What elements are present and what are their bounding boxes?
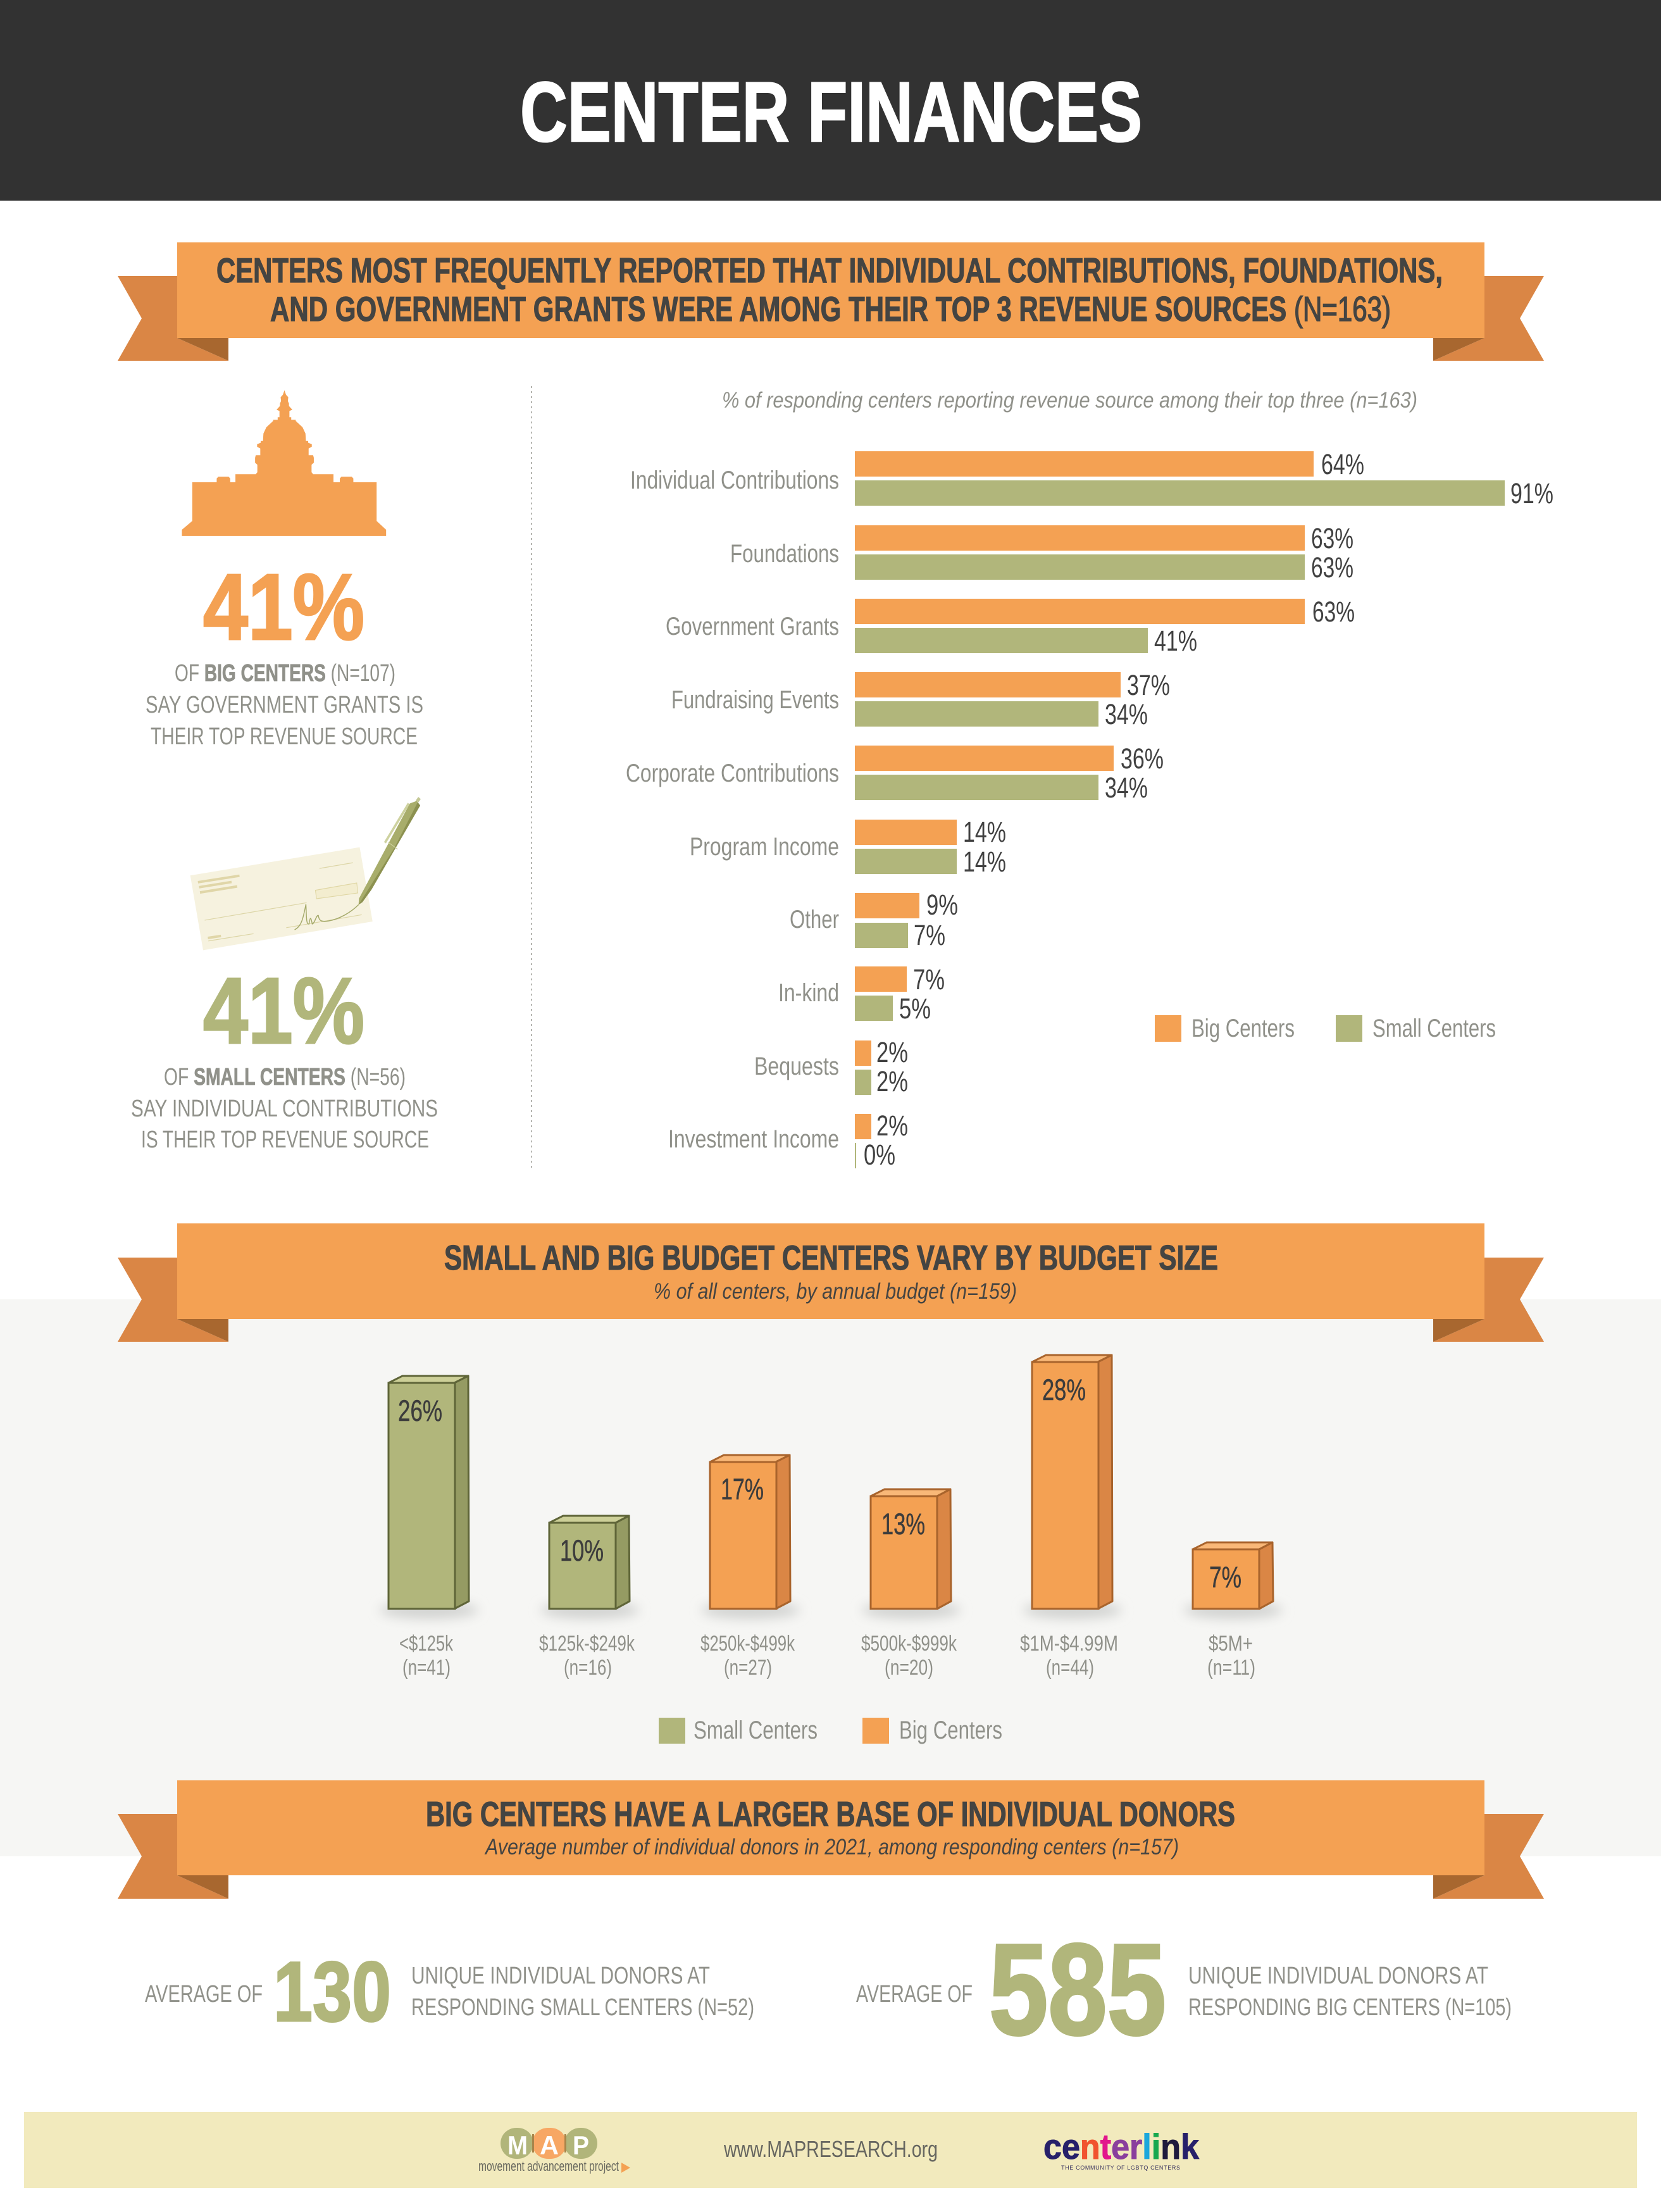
bar: under $125k: 26% xyxy=(398,1394,442,1427)
row: fundraising events xyxy=(671,669,1170,730)
stat: small centers: IS THEIR TOP REVENUE SOURCE xyxy=(141,1127,429,1153)
bar: under $125k: (n=41) xyxy=(402,1656,451,1680)
bar: $125k-$249k xyxy=(539,1516,639,1680)
ribbon heading: budget size xyxy=(118,1223,1544,1342)
logo: centerlink: THE COMMUNITY OF LGBTQ CENTERS xyxy=(1061,2165,1180,2171)
ribbon heading: individual donors xyxy=(118,1780,1544,1899)
stat: small center donors: AVERAGE OF xyxy=(145,1981,263,2008)
legend: budget chart: Big Centers xyxy=(899,1716,1002,1744)
stat: small center donors: 130 xyxy=(273,1945,391,2039)
row: program income: 14% xyxy=(963,816,1006,848)
stat: big center donors: RESPONDING BIG CENTERS (N=105) xyxy=(1188,1994,1512,2021)
row: foundations: Foundations xyxy=(730,540,839,568)
bar: $500k-$999k xyxy=(861,1489,961,1680)
stat: small center donors: RESPONDING SMALL CENTERS (N=52) xyxy=(411,1994,754,2021)
ribbon heading: revenue sources xyxy=(118,242,1544,361)
row: fundraising events: Fundraising Events xyxy=(671,686,839,714)
stat: big centers: THEIR TOP REVENUE SOURCE xyxy=(151,723,418,750)
row: investment income: Investment Income xyxy=(668,1125,839,1153)
row: individual contributions: Individual Contributions xyxy=(630,466,839,494)
legend: budget chart xyxy=(659,1716,1002,1744)
row: in-kind: In-kind xyxy=(778,979,839,1007)
bar chart: revenue sources xyxy=(626,448,1553,1171)
row: in-kind xyxy=(778,963,945,1025)
row: corporate contributions xyxy=(626,742,1164,804)
stat: small centers xyxy=(131,959,438,1153)
stat: big center donors: UNIQUE INDIVIDUAL DONORS AT xyxy=(1188,1963,1488,1989)
row: in-kind: 5% xyxy=(899,992,931,1025)
row: program income: Program Income xyxy=(690,833,839,861)
bar: under $125k xyxy=(380,1376,478,1680)
stat: big centers: SAY GOVERNMENT GRANTS IS xyxy=(146,692,423,718)
row: other xyxy=(790,889,958,951)
bar: under $125k: <$125k xyxy=(399,1632,454,1656)
row: government grants: 41% xyxy=(1154,625,1197,657)
logo: MAP: movement advancement project xyxy=(478,2158,619,2174)
row: individual contributions: 91% xyxy=(1510,477,1553,509)
row: bequests xyxy=(754,1036,908,1097)
row: individual contributions xyxy=(630,448,1553,509)
bar: $500k-$999k: $500k-$999k xyxy=(861,1632,957,1656)
row: other: 9% xyxy=(926,889,958,921)
stat: big center donors xyxy=(856,1917,1512,2062)
legend: revenue chart: Small Centers xyxy=(1372,1015,1496,1042)
website url: www.MAPRESEARCH.org xyxy=(723,2136,938,2162)
stat: small center donors: UNIQUE INDIVIDUAL DONORS AT xyxy=(411,1963,710,1989)
bar: $250k-$499k: $250k-$499k xyxy=(700,1632,795,1656)
row: fundraising events: 37% xyxy=(1127,669,1170,701)
row: fundraising events: 34% xyxy=(1105,698,1148,730)
bar: $1M-$4.99M: 28% xyxy=(1042,1373,1086,1406)
ribbon heading: individual donors: BIG CENTERS HAVE A LARGER BASE OF INDIVIDUAL DONORS xyxy=(426,1794,1235,1834)
row: in-kind: 7% xyxy=(913,963,945,996)
stat: big centers: OF BIG CENTERS (N=107) xyxy=(175,660,395,687)
logo: centerlink: centerlink xyxy=(1043,2127,1200,2166)
logo: MAP: P xyxy=(573,2130,589,2160)
footer band xyxy=(24,2112,1637,2188)
row: investment income: 2% xyxy=(876,1109,908,1142)
icon: check and pen xyxy=(190,798,420,950)
legend: budget chart: Small Centers xyxy=(694,1716,818,1744)
row: foundations xyxy=(730,522,1353,584)
stat: small centers: SAY INDIVIDUAL CONTRIBUTIONS xyxy=(131,1096,438,1122)
row: bequests: 2% xyxy=(876,1065,908,1097)
bar: $125k-$249k: 10% xyxy=(560,1534,604,1567)
stat: big center donors: 585 xyxy=(989,1917,1166,2062)
chart subtitle: % of responding centers reporting revenue source among their top three (n=163) xyxy=(722,388,1417,413)
row: government grants: 63% xyxy=(1312,596,1355,628)
bar: $250k-$499k xyxy=(700,1455,800,1680)
row: corporate contributions: 34% xyxy=(1105,772,1148,804)
ribbon heading: budget size: % of all centers, by annual budget (n=159) xyxy=(654,1279,1017,1304)
stat: big centers xyxy=(146,555,423,750)
stat: big center donors: AVERAGE OF xyxy=(856,1981,973,2008)
row: bequests: 2% xyxy=(876,1036,908,1068)
row: corporate contributions: 36% xyxy=(1121,742,1164,775)
ribbon heading: budget size: SMALL AND BIG BUDGET CENTERS VARY BY BUDGET SIZE xyxy=(444,1238,1218,1277)
stat: small center donors xyxy=(145,1945,754,2039)
bar: $1M-$4.99M: (n=44) xyxy=(1046,1656,1094,1680)
logo: MAP: M xyxy=(507,2130,528,2160)
title: CENTER FINANCES xyxy=(520,65,1142,159)
icon: capitol building xyxy=(182,391,386,536)
row: investment income: 0% xyxy=(864,1139,895,1171)
row: foundations: 63% xyxy=(1311,551,1353,584)
stat: big centers: 41% xyxy=(203,555,364,659)
row: corporate contributions: Corporate Contributions xyxy=(626,759,839,787)
bar: $1M-$4.99M xyxy=(1020,1355,1122,1680)
row: other: Other xyxy=(790,906,839,934)
logo: MAP: A xyxy=(540,2130,559,2160)
3D bar chart: budget size xyxy=(380,1355,1283,1680)
row: bequests: Bequests xyxy=(754,1053,839,1080)
bar: $250k-$499k: 17% xyxy=(721,1472,764,1506)
stat: small centers: 41% xyxy=(203,959,364,1063)
ribbon heading: individual donors: Average number of individual donors in 2021, among responding centers (n=157) xyxy=(484,1835,1179,1859)
bar: $5M+: $5M+ xyxy=(1209,1632,1253,1656)
row: government grants xyxy=(666,596,1355,657)
header band xyxy=(0,0,1661,201)
stat: small centers: OF SMALL CENTERS (N=56) xyxy=(164,1064,406,1090)
bar: $5M+: 7% xyxy=(1209,1560,1241,1594)
bar: $125k-$249k: $125k-$249k xyxy=(539,1632,635,1656)
bar: $1M-$4.99M: $1M-$4.99M xyxy=(1020,1632,1118,1656)
row: other: 7% xyxy=(914,919,945,951)
row: investment income xyxy=(668,1109,908,1171)
bar: $5M+: (n=11) xyxy=(1207,1656,1255,1680)
bar: $500k-$999k: 13% xyxy=(881,1507,925,1540)
row: individual contributions: 64% xyxy=(1321,448,1364,480)
bar: $250k-$499k: (n=27) xyxy=(724,1656,772,1680)
legend: revenue chart: Big Centers xyxy=(1191,1015,1295,1042)
bar: $125k-$249k: (n=16) xyxy=(564,1656,612,1680)
row: program income xyxy=(690,816,1006,878)
ribbon heading: revenue sources: AND GOVERNMENT GRANTS WERE AMONG THEIR TOP 3 REVENUE SOURCES (N=163) xyxy=(270,289,1391,328)
logo: MAP xyxy=(478,2128,630,2174)
bar: $5M+ xyxy=(1184,1542,1283,1680)
row: program income: 14% xyxy=(963,846,1006,878)
legend: revenue chart xyxy=(1155,1015,1496,1042)
row: government grants: Government Grants xyxy=(666,613,839,640)
bar: $500k-$999k: (n=20) xyxy=(885,1656,933,1680)
row: foundations: 63% xyxy=(1311,522,1353,554)
